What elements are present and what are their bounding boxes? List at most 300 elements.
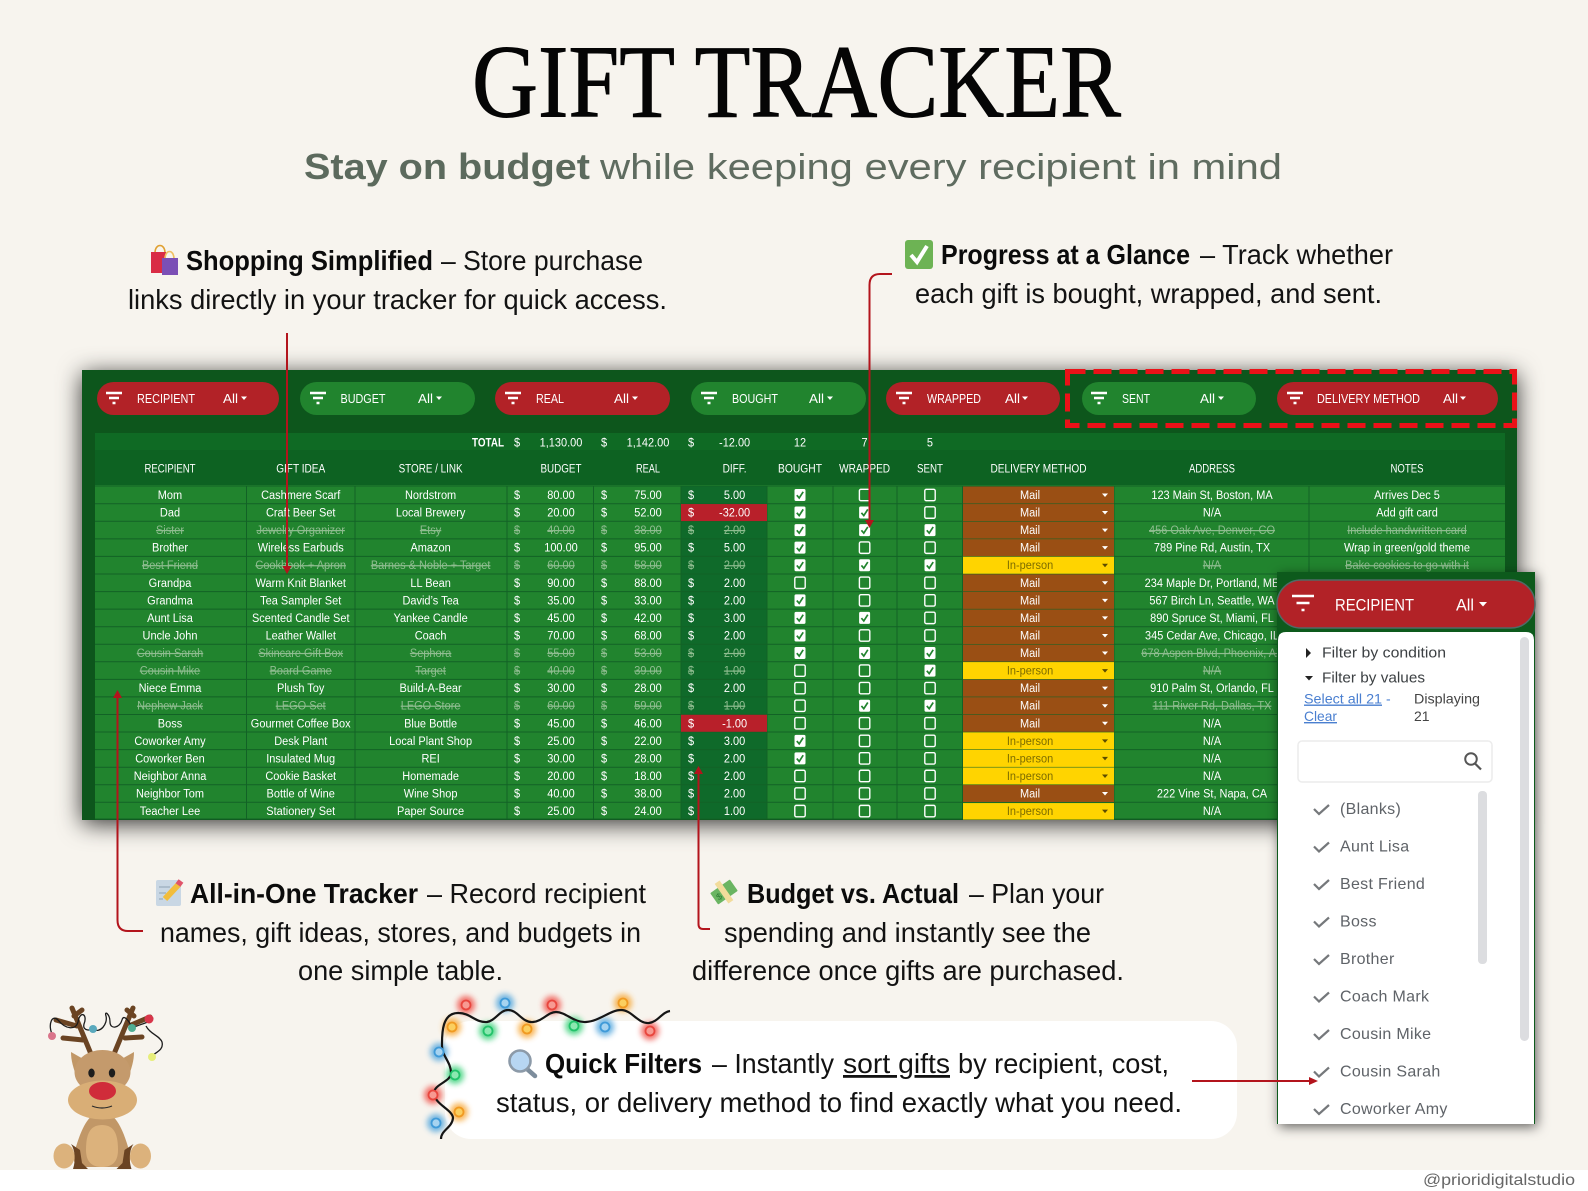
select all and clear links: Displaying [1414,690,1480,706]
row: Brother: Wireless Earbuds [258,541,344,555]
filter pill: budget: All [418,392,433,406]
row: Grandma: 2.00 [724,594,745,608]
row: Mom: $ [601,488,608,502]
row: Coworker Amy: $ [601,734,608,748]
row: Grandma: 35.00 [547,594,575,608]
row: Grandpa [149,574,1280,591]
row: Neighbor Tom: Wine Shop [404,787,457,801]
row: Coworker Ben: Coworker Ben [135,752,205,766]
row: Grandma: Mail [1020,594,1040,608]
filter by condition: Filter by condition [1322,644,1446,662]
filter pill: wrapped: All [1005,392,1020,406]
row: Cousin Mike [140,662,1221,679]
row: Cousin Sarah: $ [601,647,608,660]
subtitle: Stay on budget [304,146,590,187]
row: Coworker Ben: N/A [1203,752,1221,766]
row: Aunt Lisa: 890 Spruce St, Miami, FL [1150,611,1274,625]
row: Neighbor Anna: N/A [1203,769,1221,783]
row: Grandpa: 234 Maple Dr, Portland, ME [1145,576,1280,590]
filter pill: wrapped [886,382,1060,415]
callout: budget vs actual: – Plan your [969,878,1104,909]
row: Grandpa: 2.00 [724,576,745,590]
row: Teacher Lee: In-person [1007,805,1053,818]
column headers: BUDGET [540,464,582,476]
row: Coworker Ben: $ [601,752,608,766]
callout: quick filters: Quick Filters [545,1048,702,1079]
filter pill: recipient: All [223,392,238,406]
row: Dad: $ [688,506,695,520]
column headers [144,464,1424,476]
row: Teacher Lee: 24.00 [634,805,662,818]
row: Cousin Mike: $ [688,664,695,678]
row: Coworker Amy: $ [514,734,521,748]
row: Mom: 5.00 [724,488,745,502]
row: Nephew Jack [137,697,1272,714]
row: Coworker Amy: $ [688,734,695,748]
total row: $ [514,436,521,449]
select all and clear links: Select all 21 [1304,690,1382,706]
total row: -12.00 [719,436,750,449]
row: Uncle John: $ [514,629,521,643]
row: Dad: $ [601,506,608,520]
row: Dad: Local Brewery [396,506,466,520]
row: Uncle John: $ [688,629,695,643]
title: GIFT TRACKER [472,24,1122,140]
row: Sister: Mail [1020,524,1040,537]
row: Nephew Jack: Mail [1020,699,1040,713]
row: Brother: 100.00 [544,541,578,555]
row: Boss: -1.00 [722,717,747,730]
icon: magnifying glass [510,1050,535,1076]
row: Brother: Amazon [410,541,451,555]
row: Grandpa: 90.00 [547,576,575,590]
row: Uncle John: Mail [1020,629,1040,643]
ears [71,1052,134,1080]
row: Grandpa: 88.00 [634,576,662,590]
callout: progress at a glance: each gift is bought, wrapped, and sent. [915,278,1382,309]
row: Coworker Amy: Local Plant Shop [389,734,472,748]
filter pill: real [495,382,670,415]
row: Brother [152,539,1470,556]
row: Brother: Wrap in green/gold theme [1344,541,1470,555]
row: Neighbor Tom: Mail [1020,787,1040,801]
row: Cousin Sarah: Mail [1020,647,1040,660]
row: Coworker Amy: 3.00 [724,734,745,748]
muzzle [68,1080,137,1120]
row: Boss: $ [688,717,695,730]
row: Grandma: David’s Tea [402,594,459,608]
row: Dad: N/A [1203,506,1221,520]
footer strip [0,1170,1588,1191]
recipient value list: Coach Mark [1340,988,1430,1006]
filter pill: bought: All [809,392,824,406]
row: Coworker Amy [134,732,1221,749]
callout: quick filters: sort gifts [843,1048,950,1079]
row: Coworker Ben: $ [514,752,521,766]
row: Brother: $ [601,541,608,555]
row: Boss: Gourmet Coffee Box [251,717,351,730]
row: Grandpa: $ [688,576,695,590]
row: Mom: 75.00 [634,488,662,502]
string of lights [48,1013,162,1061]
total row: TOTAL [472,435,504,449]
filter pill: recipient [97,382,279,415]
row: Brother: Mail [1020,541,1040,555]
row: Neighbor Tom: 40.00 [547,787,575,801]
row: Cousin Sarah [137,645,1283,662]
row: Sister: Etsy [420,524,441,537]
row: Neighbor Tom: $ [688,787,695,801]
row: Coworker Ben: 2.00 [724,752,745,766]
row: Sister: 40.00 [547,524,575,537]
row: Dad: 20.00 [547,506,575,520]
row: Coworker Amy: 22.00 [634,734,662,748]
total row [472,435,933,449]
row: Best Friend: $ [688,559,695,572]
row: Boss: $ [514,717,521,730]
row: Neighbor Tom: 222 Vine St, Napa, CA [1157,787,1267,801]
row: Nephew Jack: 111 River Rd, Dallas, TX [1153,699,1272,713]
arrow: quick filters to popup [1192,1077,1318,1085]
dashed highlight around sent and delivery filters [1068,372,1514,426]
eyes [88,1068,115,1078]
filter by values: Filter by values [1322,670,1425,686]
row: Cousin Sarah: Sephora [410,647,452,660]
column headers: RECIPIENT [144,464,196,476]
row: Neighbor Anna: 18.00 [634,769,662,783]
row: Grandma: Tea Sampler Set [260,594,342,608]
row: Nephew Jack: 1.00 [724,699,745,713]
row: Coworker Amy: Coworker Amy [134,734,206,748]
row: Neighbor Anna: $ [514,769,521,783]
sheet frame [82,370,1517,820]
row: Cousin Mike: Cousin Mike [140,664,200,678]
row: Grandma: $ [601,594,608,608]
row: Aunt Lisa: $ [514,611,521,625]
total row: 1,130.00 [540,436,582,449]
row: Brother: 789 Pine Rd, Austin, TX [1154,541,1270,555]
row: Niece Emma: 2.00 [724,682,745,695]
row: Best Friend: 58.00 [634,559,662,572]
row: Sister: Jewelry Organizer [257,524,345,537]
row: Uncle John: $ [601,629,608,643]
row: Coworker Amy: 25.00 [547,734,575,748]
row: Coworker Amy: N/A [1203,734,1221,748]
search box [1298,741,1492,782]
row: Cousin Mike: N/A [1203,664,1221,678]
row: Coworker Ben: Insulated Mug [266,752,335,766]
row: Mom: 123 Main St, Boston, MA [1151,488,1273,502]
row: Neighbor Anna [134,767,1221,784]
icon: green check [905,240,933,269]
row: Best Friend: Barnes & Noble + Target [371,559,491,572]
row: Sister: Sister [156,524,184,537]
icon: memo and pencil [156,880,181,906]
row: Teacher Lee: 25.00 [547,805,575,818]
row: Coworker Ben: 30.00 [547,752,575,766]
arrow: shopping simplified to gift idea column [282,333,292,574]
row: Uncle John: 70.00 [547,629,575,643]
illustration: reindeer with lights [48,1008,162,1169]
row: Coworker Ben: REI [421,752,440,766]
row: Niece Emma: Niece Emma [139,682,202,695]
row: Aunt Lisa: Mail [1020,611,1040,625]
callout: shopping simplified [128,245,667,315]
row: Sister: 2.00 [724,524,745,537]
row: Coworker Ben [135,750,1221,767]
row: Aunt Lisa: $ [688,611,695,625]
callout: progress at a glance [905,239,1393,309]
row: Uncle John: 345 Cedar Ave, Chicago, IL [1145,629,1280,643]
row: Dad: Add gift card [1376,506,1438,520]
select all and clear links: 21 [1414,708,1430,724]
row: Aunt Lisa: 45.00 [547,611,575,625]
select all and clear links [1304,690,1480,724]
subtitle [304,146,1282,187]
icon: flying money [707,875,741,909]
row: Cousin Sarah: 55.00 [547,647,575,660]
callout: shopping simplified: links directly in your tracker for quick access. [128,284,667,315]
row: Uncle John: Leather Wallet [266,629,337,643]
row: Brother: $ [688,541,695,555]
panel: recipient filter popup [1277,572,1535,1124]
filter pill: delivery method: DELIVERY METHOD [1317,392,1420,406]
row: Teacher Lee: $ [601,805,608,818]
select all and clear links: Clear [1304,708,1337,724]
row: Sister: 456 Oak Ave, Denver, CO [1149,524,1275,537]
row: Mom: $ [514,488,521,502]
row: Teacher Lee: Paper Source [397,805,464,818]
row: Best Friend: Best Friend [142,559,198,572]
row: Boss: Blue Bottle [404,717,457,730]
row: Aunt Lisa [147,609,1274,626]
row: Best Friend: 60.00 [547,559,575,572]
arrow: budget vs actual to diff column [694,766,710,929]
row: Sister [156,522,1467,539]
row: Uncle John: 2.00 [724,629,745,643]
column headers: ADDRESS [1189,464,1235,476]
row: Mom [158,486,1440,504]
row: Grandma: $ [514,594,521,608]
row: Cousin Mike: In-person [1007,664,1053,678]
callout: all-in-one tracker: – Record recipient [427,878,646,909]
filter pill: sent [1082,382,1256,415]
row: Boss [158,715,1221,732]
row: Nephew Jack: LEGO Set [276,699,326,713]
row: Mom: Mom [158,488,182,502]
row: Aunt Lisa: Scented Candle Set [252,611,350,625]
row: Niece Emma: 28.00 [634,682,662,695]
row: Neighbor Anna: Neighbor Anna [134,769,207,783]
callout: quick filters: – Instantly [712,1048,834,1079]
callout: shopping simplified: – Store purchase [441,245,643,276]
row: Neighbor Tom: 2.00 [724,787,745,801]
recipient value list: Aunt Lisa [1340,838,1409,856]
recipient value list: Best Friend [1340,876,1425,893]
row: Cousin Mike: 40.00 [547,664,575,678]
row: Niece Emma: $ [688,682,695,695]
row: Uncle John: Coach [415,629,446,643]
row: Cousin Sarah: 678 Aspen Blvd, Phoenix, AZ [1141,647,1283,660]
row: Neighbor Anna: Cookie Basket [265,769,337,783]
row: Coworker Ben: $ [688,752,695,766]
row: Neighbor Tom: 38.00 [634,787,662,801]
recipient value list: Boss [1340,914,1377,930]
white card [445,1021,1237,1139]
column headers: REAL [636,464,660,476]
row: Coworker Ben: In-person [1007,752,1053,766]
callout: all-in-one tracker [156,878,646,986]
row: Best Friend [142,557,1470,574]
row: Neighbor Anna: $ [688,769,695,783]
callout: quick filters: by recipient, cost, [958,1048,1169,1079]
row: Grandma [147,592,1275,609]
filter pill: bought [691,382,866,415]
string lights garland [424,994,670,1139]
row: Aunt Lisa: Yankee Candle [394,611,468,625]
row: Niece Emma: Build-A-Bear [400,682,462,695]
row: Teacher Lee: N/A [1203,805,1221,818]
row: Sister: 38.00 [634,524,662,537]
row: Sister: $ [601,524,608,537]
row: Aunt Lisa: 42.00 [634,611,662,625]
column headers: DELIVERY METHOD [990,464,1086,476]
select all and clear links: - [1386,690,1391,706]
row: Neighbor Anna: 20.00 [547,769,575,783]
row: Best Friend: $ [601,559,608,572]
filter pill: real: REAL [536,392,564,406]
icon: flying money: $ [714,891,724,902]
filter pill: bought: BOUGHT [732,392,778,406]
callout: all-in-one tracker: one simple table. [298,955,503,986]
row: Dad [160,504,1438,521]
filter pill: delivery method: All [1443,392,1458,406]
row: Mom: Cashmere Scarf [261,488,341,502]
row: Uncle John: 68.00 [634,629,662,643]
row: Sister: $ [688,524,695,537]
row: Cousin Sarah: Cousin Sarah [137,647,203,660]
popup filter pill: All [1456,596,1474,614]
recipient value list: Coworker Amy [1340,1101,1448,1118]
total row: 5 [927,436,933,449]
row: Nephew Jack: 60.00 [547,699,575,713]
row: Coworker Amy: Desk Plant [274,734,328,748]
row: Teacher Lee: Teacher Lee [140,805,200,818]
arrow: progress to wrapped column [865,274,892,528]
row: Boss: 45.00 [547,717,575,730]
row: Best Friend: Cookbook + Apron [255,559,346,572]
recipient value list: Cousin Sarah [1340,1064,1441,1080]
head [74,1050,130,1094]
row: Neighbor Anna: 2.00 [724,769,745,783]
filter pill: wrapped: WRAPPED [927,392,981,406]
row: Cousin Mike: Target [415,664,447,678]
row: Dad: Craft Beer Set [266,506,336,520]
row: Cousin Sarah: $ [514,647,521,660]
row: Neighbor Tom: Bottle of Wine [267,787,335,801]
row: Aunt Lisa: Aunt Lisa [147,611,193,625]
row: Brother: 5.00 [724,541,745,555]
row: Grandpa: Mail [1020,576,1040,590]
row: Cousin Sarah: Skincare Gift Box [258,647,343,660]
row: Boss: Boss [158,717,182,730]
row: Aunt Lisa: $ [601,611,608,625]
filter pill: budget: BUDGET [340,392,386,406]
row: Dad: Dad [160,506,180,520]
row: Aunt Lisa: 3.00 [724,611,745,625]
row: Niece Emma: 910 Palm St, Orlando, FL [1150,682,1274,695]
row: Cousin Mike: $ [601,664,608,678]
column headers: WRAPPED [839,464,890,476]
total row: 12 [794,436,806,449]
row: Brother: $ [514,541,521,555]
row: Cousin Sarah: $ [688,647,695,660]
row: Neighbor Anna: In-person [1007,769,1053,783]
row: Teacher Lee: 1.00 [724,805,745,818]
column headers: BOUGHT [778,464,822,476]
row: Brother: 95.00 [634,541,662,555]
callout: budget vs actual: Budget vs. Actual [747,878,959,909]
subtitle: while keeping every recipient in mind [599,146,1282,187]
antlers [56,1008,150,1054]
row: Niece Emma: $ [601,682,608,695]
row: Coworker Amy: In-person [1007,734,1053,748]
callout: quick filters [445,1021,1237,1139]
row: Mom: Arrives Dec 5 [1374,488,1440,502]
recipient value list: Brother [1340,951,1395,968]
row: Neighbor Anna: Homemade [402,769,459,783]
row: Mom: Nordstrom [405,488,456,502]
row: Teacher Lee [140,803,1221,820]
row: Coworker Ben: 28.00 [634,752,662,766]
row: Grandpa: $ [601,576,608,590]
row: Mom: 80.00 [547,488,575,502]
column headers: NOTES [1390,464,1424,476]
callout: budget vs actual: spending and instantly see the [724,917,1091,948]
row: Grandma: $ [688,594,695,608]
row: Dad: $ [514,506,521,520]
row: Grandpa: LL Bean [410,576,451,590]
row: Nephew Jack: $ [688,699,695,713]
panel: gift tracker spreadsheet [82,370,1517,820]
row: Neighbor Tom: $ [601,787,608,801]
row: Dad: Mail [1020,506,1040,520]
row: Teacher Lee: $ [688,805,695,818]
callout: budget vs actual [692,875,1124,986]
row: Neighbor Anna: $ [601,769,608,783]
row: Nephew Jack: $ [514,699,521,713]
arrow: all-in-one tracker to recipient column [113,690,143,931]
popup filter pill [1277,580,1535,628]
row: Teacher Lee: $ [514,805,521,818]
row: Boss: $ [601,717,608,730]
callout: progress at a glance: Progress at a Glance [941,239,1190,270]
filter pill: budget [300,382,475,415]
row: Brother: Brother [152,541,188,555]
credit handle: @prioridigitalstudio [1423,1172,1575,1189]
row: Uncle John [143,627,1280,644]
column headers: STORE / LINK [399,464,463,476]
row: Nephew Jack: 59.00 [634,699,662,713]
row: Best Friend: In-person [1007,559,1053,572]
callout: all-in-one tracker: All-in-One Tracker [190,878,418,909]
row: Uncle John: Uncle John [143,629,197,643]
row: Nephew Jack: LEGO Store [401,699,460,713]
callout: all-in-one tracker: names, gift ideas, stores, and budgets in [160,917,641,948]
row: Grandma: 567 Birch Ln, Seattle, WA [1149,594,1275,608]
filter pill: sent: SENT [1122,392,1150,406]
row: Grandpa: Grandpa [149,576,192,590]
